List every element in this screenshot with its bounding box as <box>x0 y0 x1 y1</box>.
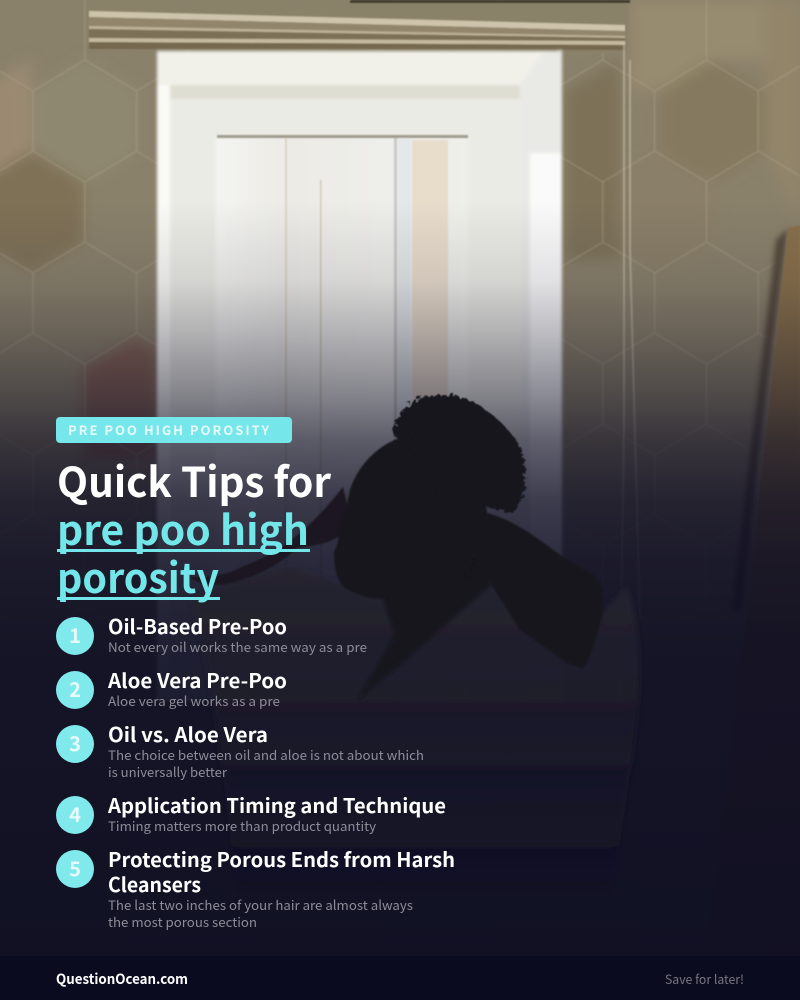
tip 5: The last two inches of your hair are almost always <box>108 895 413 914</box>
tip 1: Not every oil works the same way as a pre <box>108 637 367 656</box>
title: Quick Tips for <box>57 449 331 509</box>
title: porosity <box>57 545 219 605</box>
raised forearm left <box>190 487 352 585</box>
footer bar: Save for later! <box>665 969 744 988</box>
tip 3: is universally better <box>108 762 228 781</box>
category tag: PRE POO HIGH POROSITY <box>68 420 269 439</box>
tip 1: Oil-Based Pre-Poo <box>108 611 287 640</box>
tip 3: 3 <box>69 728 81 757</box>
glass details <box>217 135 468 700</box>
tip 2 <box>56 665 287 710</box>
curtain cords <box>620 42 640 700</box>
title: pre poo high <box>57 497 309 557</box>
roman blind <box>88 0 630 54</box>
category tag <box>56 417 292 443</box>
tip 2: Aloe Vera Pre-Poo <box>107 665 287 694</box>
tips list <box>56 611 455 931</box>
title <box>57 449 331 605</box>
footer bar <box>0 956 800 1000</box>
tip 1: 1 <box>69 620 81 649</box>
woman silhouette <box>190 395 639 950</box>
tip 5: Cleansers <box>108 869 201 898</box>
neck and chest <box>358 540 492 700</box>
footer bar: QuestionOcean.com <box>56 969 188 989</box>
raised arm and hand <box>410 430 604 668</box>
head <box>334 438 485 599</box>
tip 4: 4 <box>69 799 81 828</box>
tip 5 <box>56 844 455 931</box>
tip 3: The choice between oil and aloe is not about which <box>108 745 424 764</box>
tip 2: 2 <box>69 674 81 703</box>
tip 5: 5 <box>69 853 81 882</box>
tip 5: Protecting Porous Ends from Harsh <box>108 844 455 873</box>
tip 3 <box>56 719 424 781</box>
tip 5: the most porous section <box>108 912 257 931</box>
tip 3: Oil vs. Aloe Vera <box>108 719 268 748</box>
tip 2: Aloe vera gel works as a pre <box>108 691 280 710</box>
bamboo ladder <box>700 225 800 1000</box>
tip 4: Application Timing and Technique <box>107 790 446 819</box>
hair <box>393 395 525 580</box>
bathrobe <box>192 567 639 950</box>
window reveal and frame <box>157 50 562 701</box>
tip 4: Timing matters more than product quantity <box>108 816 376 835</box>
tip 1 <box>56 611 367 656</box>
tip 4 <box>56 790 446 835</box>
